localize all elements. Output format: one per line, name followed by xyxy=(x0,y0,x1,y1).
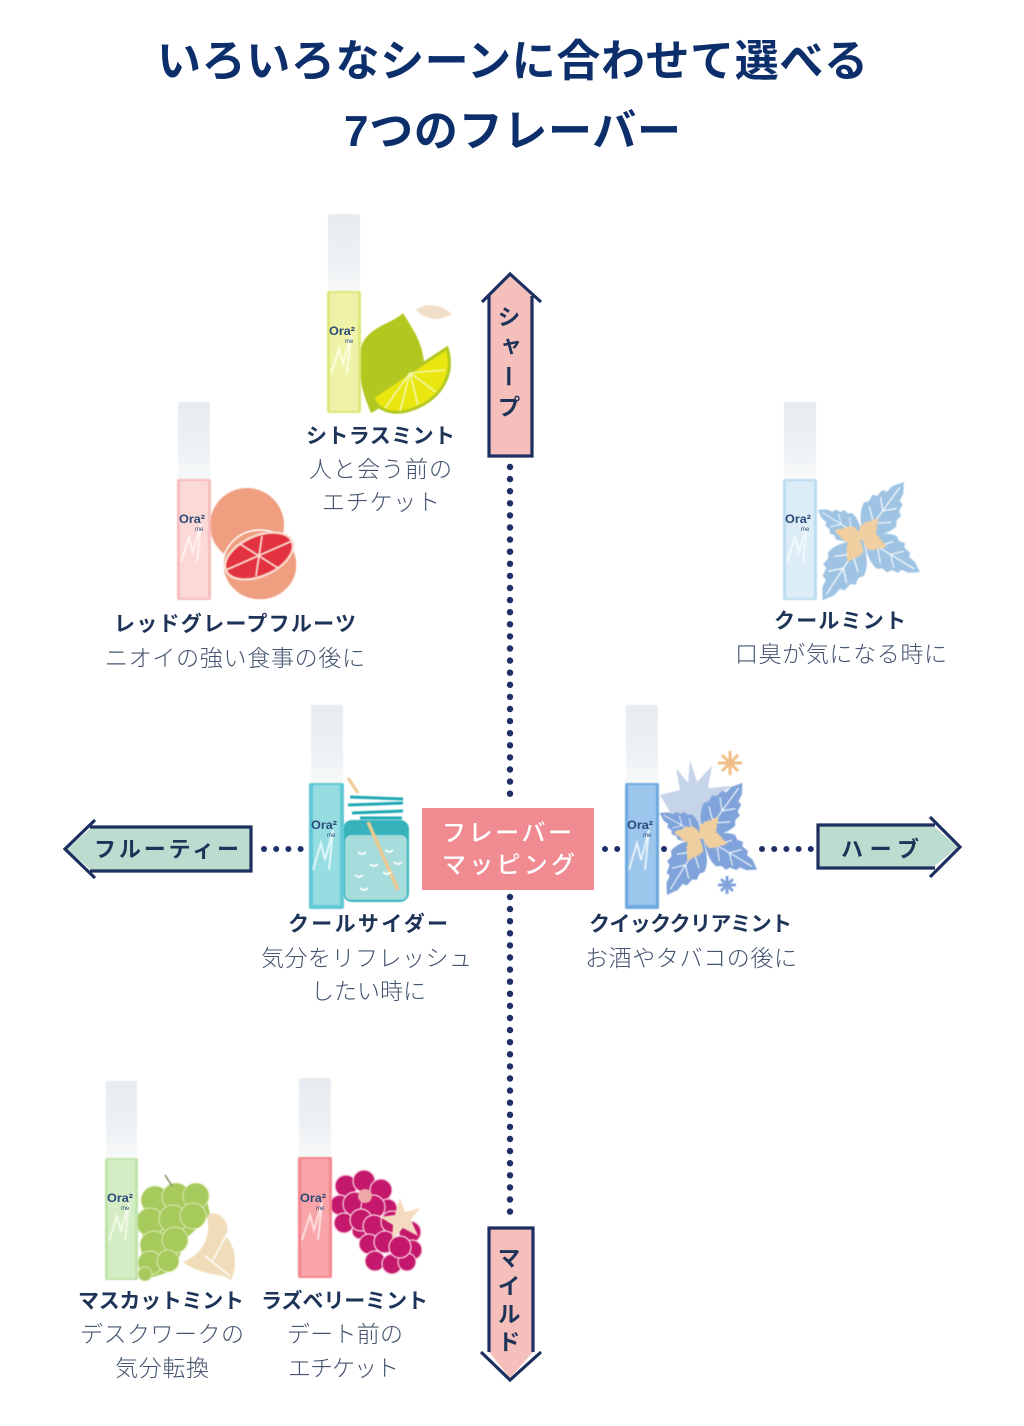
bottle: me xyxy=(195,527,204,533)
arrow: mild xyxy=(481,1228,541,1380)
bottle xyxy=(298,1078,332,1278)
illustration: mint and stars xyxy=(650,751,767,905)
title: いろいろなシーンに合わせて選べる xyxy=(157,37,868,86)
description xyxy=(80,1321,244,1381)
horizontal dotted axis xyxy=(264,846,812,852)
bottle: me xyxy=(327,833,336,839)
bottle xyxy=(625,705,659,909)
arrow: herb xyxy=(818,817,960,877)
name: レッドグレープフルーツ xyxy=(114,612,356,636)
name: シトラスミント xyxy=(306,425,455,448)
product: cool mint xyxy=(735,402,947,667)
description: 気分をリフレッシュ xyxy=(261,945,472,971)
center label: flavor mapping: フレーバー xyxy=(442,820,572,847)
bottle: me xyxy=(801,527,810,533)
bottle: Ora² xyxy=(785,512,811,526)
description xyxy=(261,945,472,1004)
bottle: Ora² xyxy=(179,512,205,526)
description: エチケット xyxy=(322,489,440,515)
bottle xyxy=(327,214,361,413)
name: マスカットミント xyxy=(78,1290,244,1313)
title xyxy=(157,37,868,156)
bottle xyxy=(783,402,817,600)
bottle: me xyxy=(316,1206,325,1212)
bottle: Ora² xyxy=(329,324,355,338)
bottle xyxy=(177,402,211,600)
title: 7つのフレーバー xyxy=(344,107,681,156)
description: 口臭が気になる時に xyxy=(735,641,947,667)
bottle xyxy=(309,705,344,909)
arrow: herb: ハーブ xyxy=(841,837,919,862)
description: したい時に xyxy=(311,978,426,1004)
product: red grapefruit xyxy=(105,402,365,671)
name: ラズベリーミント xyxy=(261,1289,428,1313)
bottle: me xyxy=(121,1206,130,1212)
center label: flavor mapping xyxy=(422,808,594,890)
description xyxy=(287,1321,403,1381)
product: quick clear mint xyxy=(585,705,797,971)
arrow: fruity xyxy=(65,820,251,878)
description: 気分転換 xyxy=(115,1355,209,1381)
bottle: me xyxy=(643,833,652,839)
description: デート前の xyxy=(287,1321,403,1347)
bottle: Ora² xyxy=(311,818,337,832)
center label: flavor mapping: マッピング xyxy=(442,852,575,879)
illustration: grapefruit xyxy=(210,488,300,600)
product: cool cider xyxy=(261,705,472,1004)
description: お酒やタバコの後に xyxy=(585,945,797,971)
illustration: mint leaves xyxy=(804,470,930,612)
bottle: me xyxy=(345,339,354,345)
bottle xyxy=(105,1081,138,1280)
illustration: jar xyxy=(343,778,409,902)
illustration: lime xyxy=(359,305,452,413)
description xyxy=(309,456,452,515)
name: クールミント xyxy=(774,610,906,633)
name: クールサイダー xyxy=(288,912,448,936)
name: クイッククリアミント xyxy=(589,913,792,936)
vertical dotted axis xyxy=(507,467,513,1220)
bottle: Ora² xyxy=(627,818,653,832)
arrow: mild: マイルド xyxy=(494,1246,520,1358)
description: デスクワークの xyxy=(80,1321,244,1347)
arrow: sharp xyxy=(482,274,541,456)
description: ニオイの強い食事の後に xyxy=(105,645,365,671)
product: muscat mint xyxy=(78,1081,244,1381)
bottle: Ora² xyxy=(107,1191,133,1205)
product: citrus mint xyxy=(306,214,455,515)
product: raspberry mint xyxy=(261,1078,428,1381)
arrow: fruity: フルーティー xyxy=(94,837,239,862)
illustration: raspberry xyxy=(330,1170,422,1274)
description: エチケット xyxy=(288,1355,399,1381)
description: 人と会う前の xyxy=(309,456,452,482)
illustration: grapes xyxy=(136,1175,235,1281)
bottle: Ora² xyxy=(300,1191,326,1205)
arrow: sharp: シャープ xyxy=(494,305,520,425)
